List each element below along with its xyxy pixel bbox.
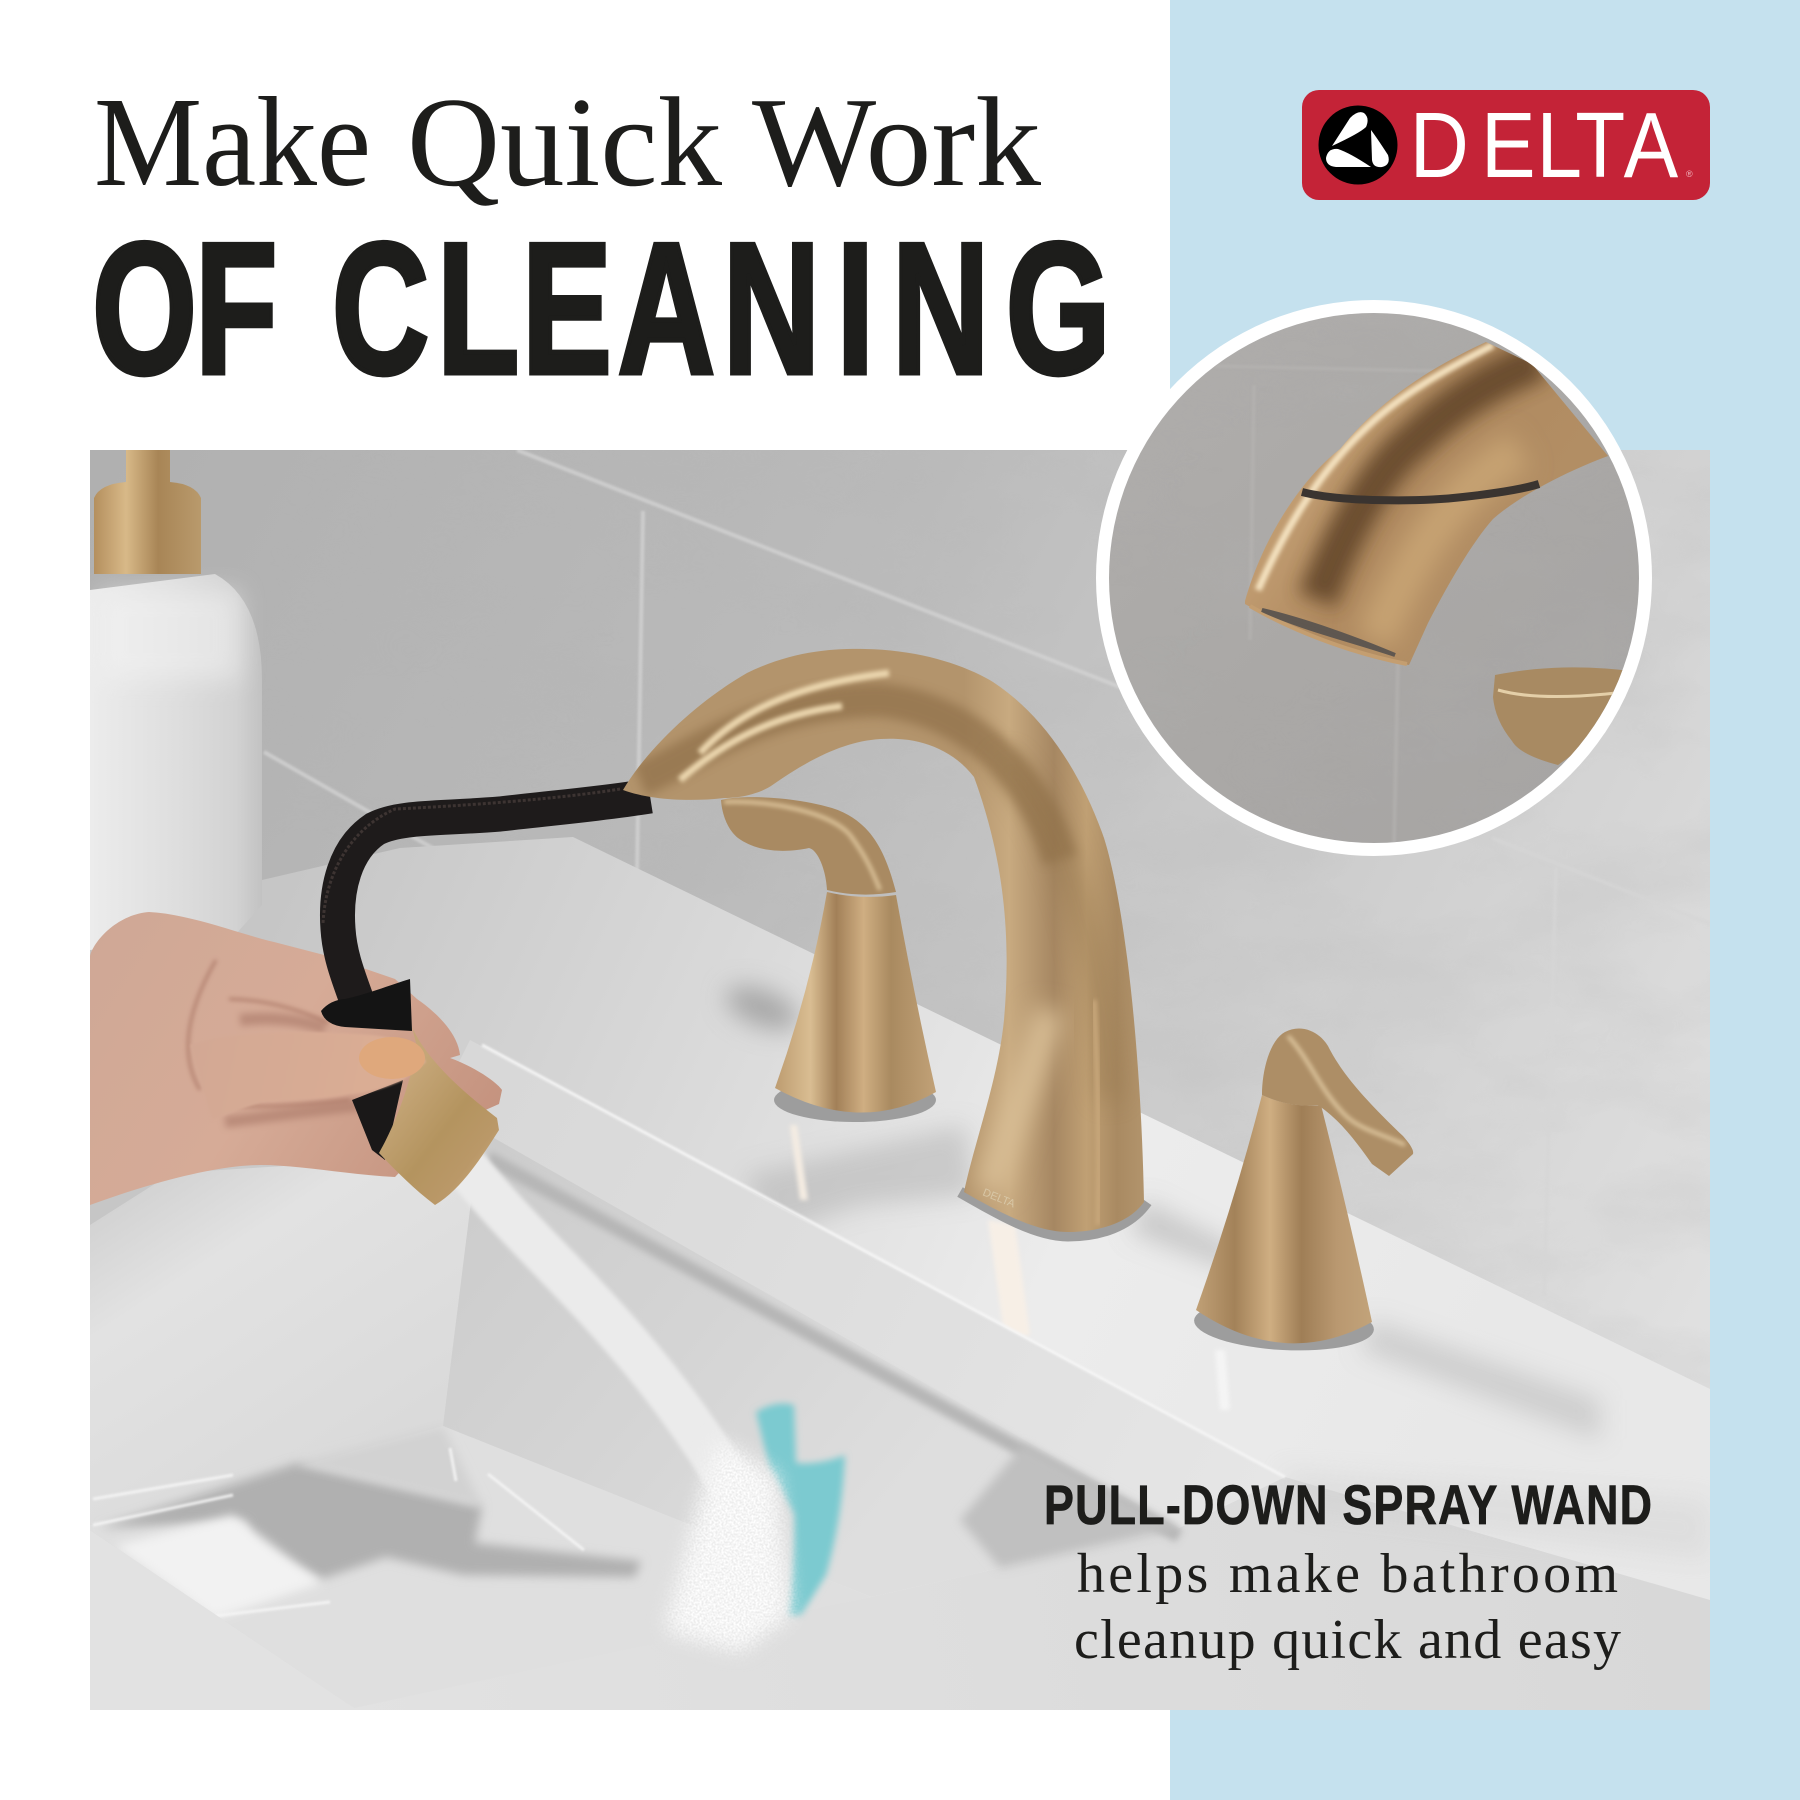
bottle pump cap: [94, 450, 201, 574]
soap bottle: [90, 450, 262, 950]
faucet: right handle: [1193, 1028, 1413, 1355]
icon: Delta triangle mark: [1318, 106, 1398, 184]
flexible braided hose and hand: [90, 789, 650, 1205]
left counter triangle: [90, 1530, 354, 1712]
blue soap: [756, 1404, 845, 1615]
inset second handle: [1493, 667, 1630, 765]
marble wall: [90, 450, 1710, 1450]
sink right wall: [487, 1138, 1011, 1597]
callout: inset close-up of spout: [1096, 300, 1652, 856]
left handle lever: [721, 797, 896, 895]
logo wordmark: DELTA: [1410, 93, 1679, 197]
sink floor: [90, 1426, 871, 1708]
hand: palm and fingers: [90, 912, 502, 1205]
thumb: [190, 1032, 426, 1120]
counter reflections: [790, 1125, 1230, 1410]
callout heading: PULL-DOWN SPRAY WAND: [1044, 1473, 1652, 1536]
shadow under lip: [488, 1158, 1179, 1536]
faucet base engraving: DELTA: [981, 1187, 1017, 1211]
callout line two: cleanup quick and easy: [1074, 1609, 1621, 1671]
faucet: main spout: [623, 649, 1147, 1236]
inset spout seam: [1302, 484, 1539, 500]
counter front: [321, 1477, 1710, 1710]
faucet: left handle: [721, 797, 936, 1122]
nozzle gold shell: [379, 1027, 499, 1205]
background: light blue panel: [1170, 0, 1800, 1800]
thumbnail: [359, 1037, 425, 1079]
inset photo: [1109, 313, 1639, 845]
shadow between fingers: [225, 1019, 360, 1122]
inset white ring: [1096, 300, 1652, 856]
water stream: [469, 1170, 788, 1650]
background: white panel: [0, 0, 1170, 1800]
inset spout opening: [1250, 606, 1407, 664]
callout text: pull-down spray wand: [1044, 1473, 1652, 1671]
title: serif line: Work: [752, 71, 1041, 213]
water streaks: [93, 1448, 584, 1616]
title: serif line: Quick: [407, 71, 722, 213]
faucet shadows on counter: [720, 977, 1600, 1440]
water highlight patch: [115, 1515, 322, 1619]
hose: [337, 796, 650, 1010]
title: bold line: OF CLEANING: [92, 204, 1111, 413]
title: serif line: Make: [94, 71, 371, 213]
photo: bathroom sink with faucet: [90, 450, 1710, 1712]
splash foam: [667, 1441, 788, 1650]
callout line one: helps make bathroom: [1077, 1543, 1618, 1605]
nozzle black cap: [321, 979, 412, 1031]
right handle lever: [1262, 1028, 1413, 1176]
sink interior: [90, 1130, 1179, 1708]
front lip of sink: [480, 1046, 1120, 1470]
title: serif line: [94, 71, 1041, 213]
counter top: [90, 837, 1710, 1710]
sink back wall: [90, 1166, 470, 1525]
registered mark: ®: [1686, 169, 1693, 179]
hand shadow on sink: [99, 1463, 641, 1579]
logo: Delta: [1302, 90, 1710, 200]
nozzle black shell: [352, 1080, 403, 1160]
inset spout: [1245, 342, 1608, 665]
